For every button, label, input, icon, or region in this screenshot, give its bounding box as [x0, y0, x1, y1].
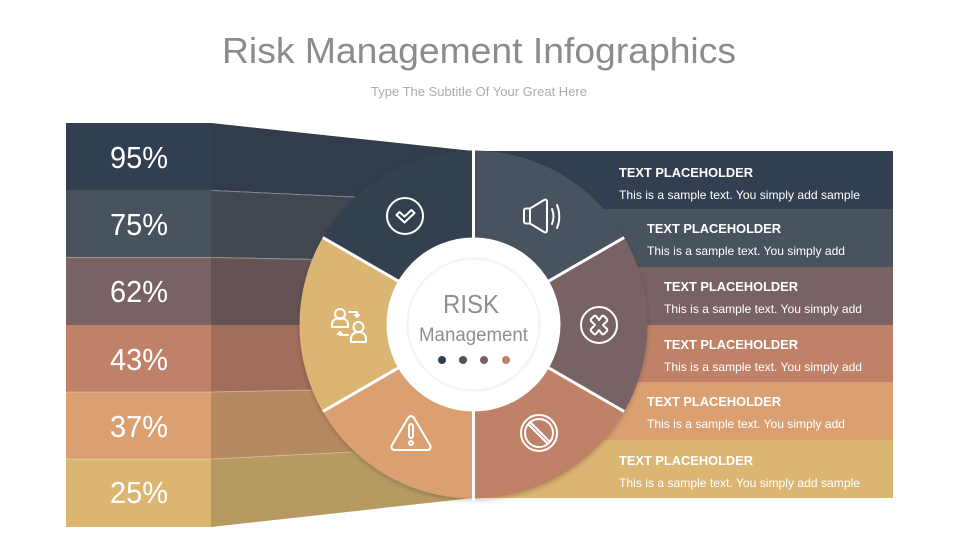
- panel: circular pie: [299, 148, 648, 501]
- band: 75%: [66, 190, 380, 260]
- band: 75%: 75%: [110, 207, 168, 242]
- center dots: [438, 356, 510, 364]
- center circle: [386, 238, 560, 412]
- band: row 2: This is a sample text. You simply add: [647, 244, 845, 258]
- band: 43%: [66, 325, 340, 392]
- band: row 3: [473, 267, 893, 325]
- band: 25%: 25%: [110, 475, 168, 510]
- band: 25%: [66, 440, 473, 527]
- segment separators: [323, 148, 624, 501]
- pie segments: [299, 150, 648, 498]
- band: row 5: This is a sample text. You simply add: [647, 417, 845, 431]
- band: 95%: [66, 123, 473, 200]
- band: row 1: [473, 151, 893, 209]
- band: row 2: TEXT PLACEHOLDER: [647, 221, 782, 236]
- band: row 5: TEXT PLACEHOLDER: [647, 394, 782, 409]
- band: 43%: 43%: [110, 342, 168, 377]
- center label: RISK: RISK: [443, 289, 500, 319]
- band: 37%: 37%: [110, 409, 168, 444]
- band: row 1: TEXT PLACEHOLDER: [619, 165, 754, 180]
- band: 62%: 62%: [110, 274, 168, 309]
- band: row 5: [473, 382, 893, 440]
- subtitle: Type The Subtitle Of Your Great Here: [371, 85, 587, 99]
- band: row 6: [473, 440, 893, 498]
- band: row 3: This is a sample text. You simply add: [664, 302, 862, 316]
- title: Risk Management Infographics: [222, 30, 736, 71]
- band: row 4: This is a sample text. You simply add: [664, 360, 862, 374]
- icon: warning: [391, 416, 431, 450]
- band: row 4: [473, 325, 893, 382]
- band: row 1: This is a sample text. You simply add sample: [619, 188, 860, 202]
- band: row 2: [473, 209, 893, 267]
- icon: cross: [581, 307, 617, 343]
- icon: people exchange: [332, 309, 366, 342]
- band: row 3: TEXT PLACEHOLDER: [664, 279, 799, 294]
- icon: ban: [521, 415, 557, 451]
- band: 95%: 95%: [110, 140, 168, 175]
- icon: speaker: [524, 200, 559, 232]
- center label: Management: Management: [419, 325, 529, 346]
- band: row 6: TEXT PLACEHOLDER: [619, 453, 754, 468]
- band: row 4: TEXT PLACEHOLDER: [664, 337, 799, 352]
- band: 62%: [66, 257, 340, 325]
- panel: right text bands: [473, 151, 893, 498]
- icon: check: [387, 198, 423, 234]
- panel: left percentage bands: [66, 123, 473, 527]
- band: row 6: This is a sample text. You simply add sample: [619, 476, 860, 490]
- band: 37%: [66, 390, 380, 459]
